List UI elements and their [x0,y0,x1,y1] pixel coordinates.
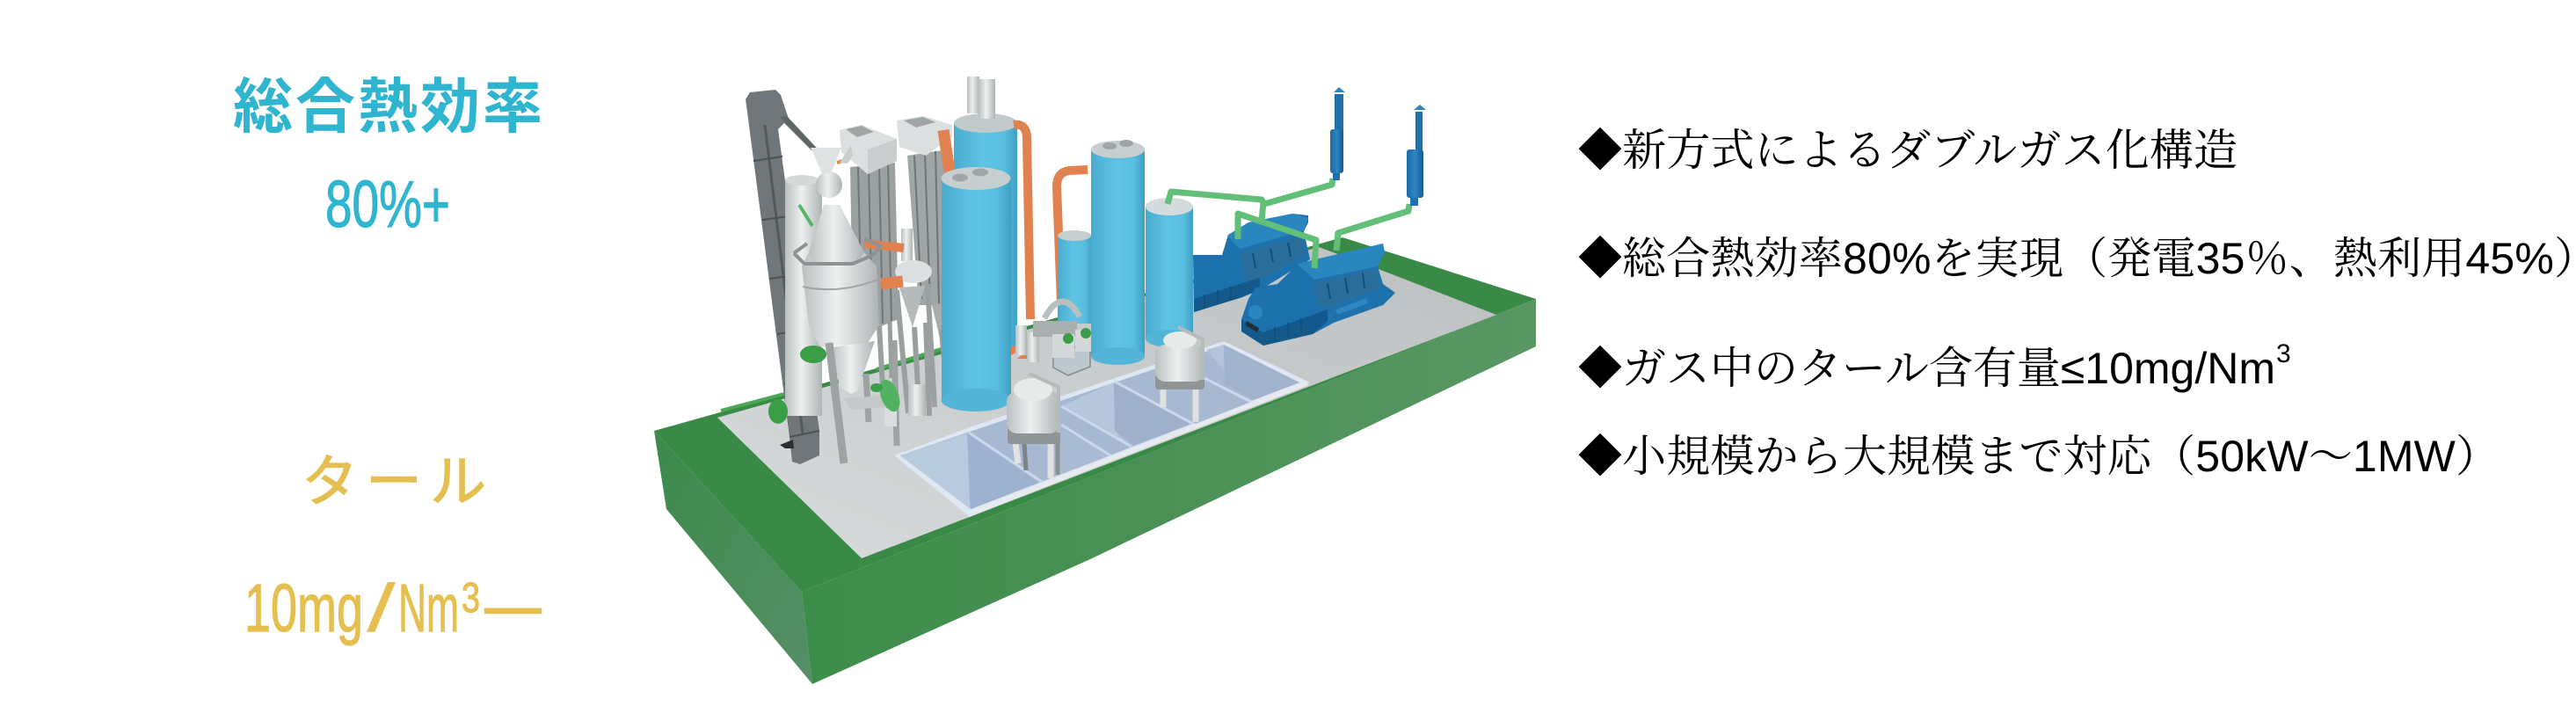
front blue tank [941,167,1011,411]
water pools [894,341,1310,517]
feature: tar content in gas: 3 [2276,339,2291,368]
cooling tower 1 [1007,374,1060,478]
green rim left strip [721,394,784,411]
cooling tower 2 [1155,327,1204,422]
value: 10mg/Nm3 or less: 10mg [244,571,363,646]
value: 10mg/Nm3 or less: 3 [462,575,480,622]
value: 10mg/Nm3 or less: / [367,571,397,646]
gas reactor [794,145,897,463]
exhaust vents [1330,87,1426,206]
feature: efficiency breakdown: ◆総合熱効率80%を実現（発電35％、熱利用45%） [1578,234,2576,283]
stat: tar content [244,450,541,646]
back blue tank [954,76,1017,352]
blue tank by engines [1146,198,1193,347]
generator engine front [1241,244,1395,346]
platform base [654,237,1536,684]
feature: scale range: ◆小規模から大規模まで対応（50kW～1MW） [1578,432,2500,481]
value: 10mg/Nm3 or less: Nm [398,571,459,646]
filter bank 1 [840,125,899,327]
back green rim strip [877,346,952,369]
stat: total thermal efficiency [233,74,542,241]
legs and cyclone [879,229,946,416]
orange pipes [837,125,1088,369]
green exhaust pipes [1168,178,1409,268]
tall blue tank [1091,140,1145,365]
generator engine rear [1193,214,1310,312]
feature: double gasification: ◆新方式によるダブルガス化構造 [1578,126,2238,175]
heading: total thermal efficiency: 総合熱効率 [233,74,542,141]
small blue tank [1058,230,1092,324]
value: 10mg/Nm3 or less [244,571,541,646]
bucket elevator [746,90,824,464]
green bar [799,205,812,226]
value: 80%+: 80%+ [325,167,450,241]
central pump unit [1011,302,1092,380]
white silo behind reactor [785,175,822,416]
illustration: gasification power plant [654,76,1536,684]
value: 10mg/Nm3 or less: — [485,574,541,637]
filter bank 2 [897,116,952,334]
feature: tar content in gas: ◆ガス中のタール含有量≤10mg/Nm [1578,344,2275,393]
feature list [1578,126,2576,481]
heading: tar: タール [302,450,486,513]
green motors [768,346,904,424]
